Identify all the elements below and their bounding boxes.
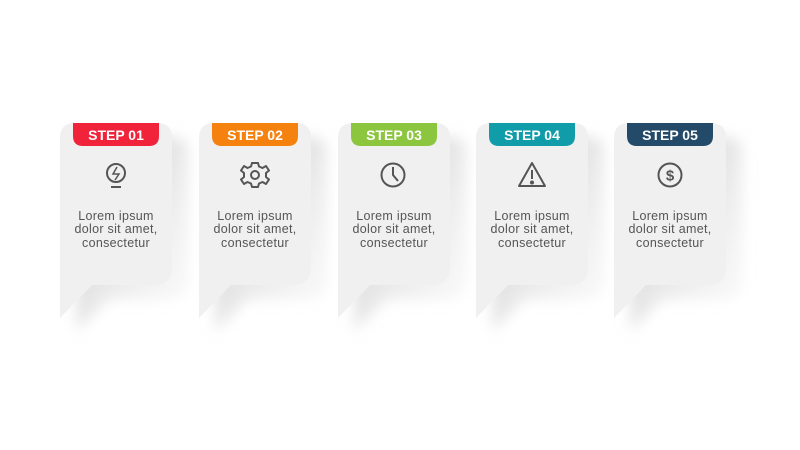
text: dolor sit amet, (74, 222, 158, 236)
tab: step 05 (627, 123, 713, 146)
tab: step 01: STEP 01 (88, 127, 144, 143)
text: consectetur (221, 236, 289, 250)
text (352, 209, 436, 250)
tab: step 04: STEP 04 (504, 127, 560, 143)
text (490, 209, 574, 250)
icon: warning (519, 163, 545, 186)
text: dolor sit amet, (213, 222, 297, 236)
text (628, 209, 712, 250)
text: consectetur (82, 236, 150, 250)
text: dolor sit amet, (352, 222, 436, 236)
text: consectetur (360, 236, 428, 250)
card 2 (199, 123, 327, 332)
card 3 (338, 123, 466, 332)
text: Lorem ipsum (217, 209, 293, 223)
text: Lorem ipsum (356, 209, 432, 223)
icon: gear (241, 163, 269, 187)
tab: step 03: STEP 03 (366, 127, 422, 143)
text: consectetur (498, 236, 566, 250)
card 1 (60, 123, 188, 332)
text: Lorem ipsum (632, 209, 708, 223)
icon: dollar (658, 164, 682, 186)
text: Lorem ipsum (494, 209, 570, 223)
tab: step 01 (73, 123, 159, 146)
icon: dollar: $ (666, 168, 675, 184)
text (74, 209, 158, 250)
text (213, 209, 297, 250)
tab: step 04 (489, 123, 575, 146)
icon: bulb (107, 164, 125, 187)
text: dolor sit amet, (490, 222, 574, 236)
tab: step 02 (212, 123, 298, 146)
text: dolor sit amet, (628, 222, 712, 236)
tab: step 02: STEP 02 (227, 127, 283, 143)
tab: step 05: STEP 05 (642, 127, 698, 143)
text: consectetur (636, 236, 704, 250)
card 5 (614, 123, 742, 332)
text: Lorem ipsum (78, 209, 154, 223)
icon: clock (382, 164, 404, 186)
tab: step 03 (351, 123, 437, 146)
card 4 (476, 123, 604, 332)
